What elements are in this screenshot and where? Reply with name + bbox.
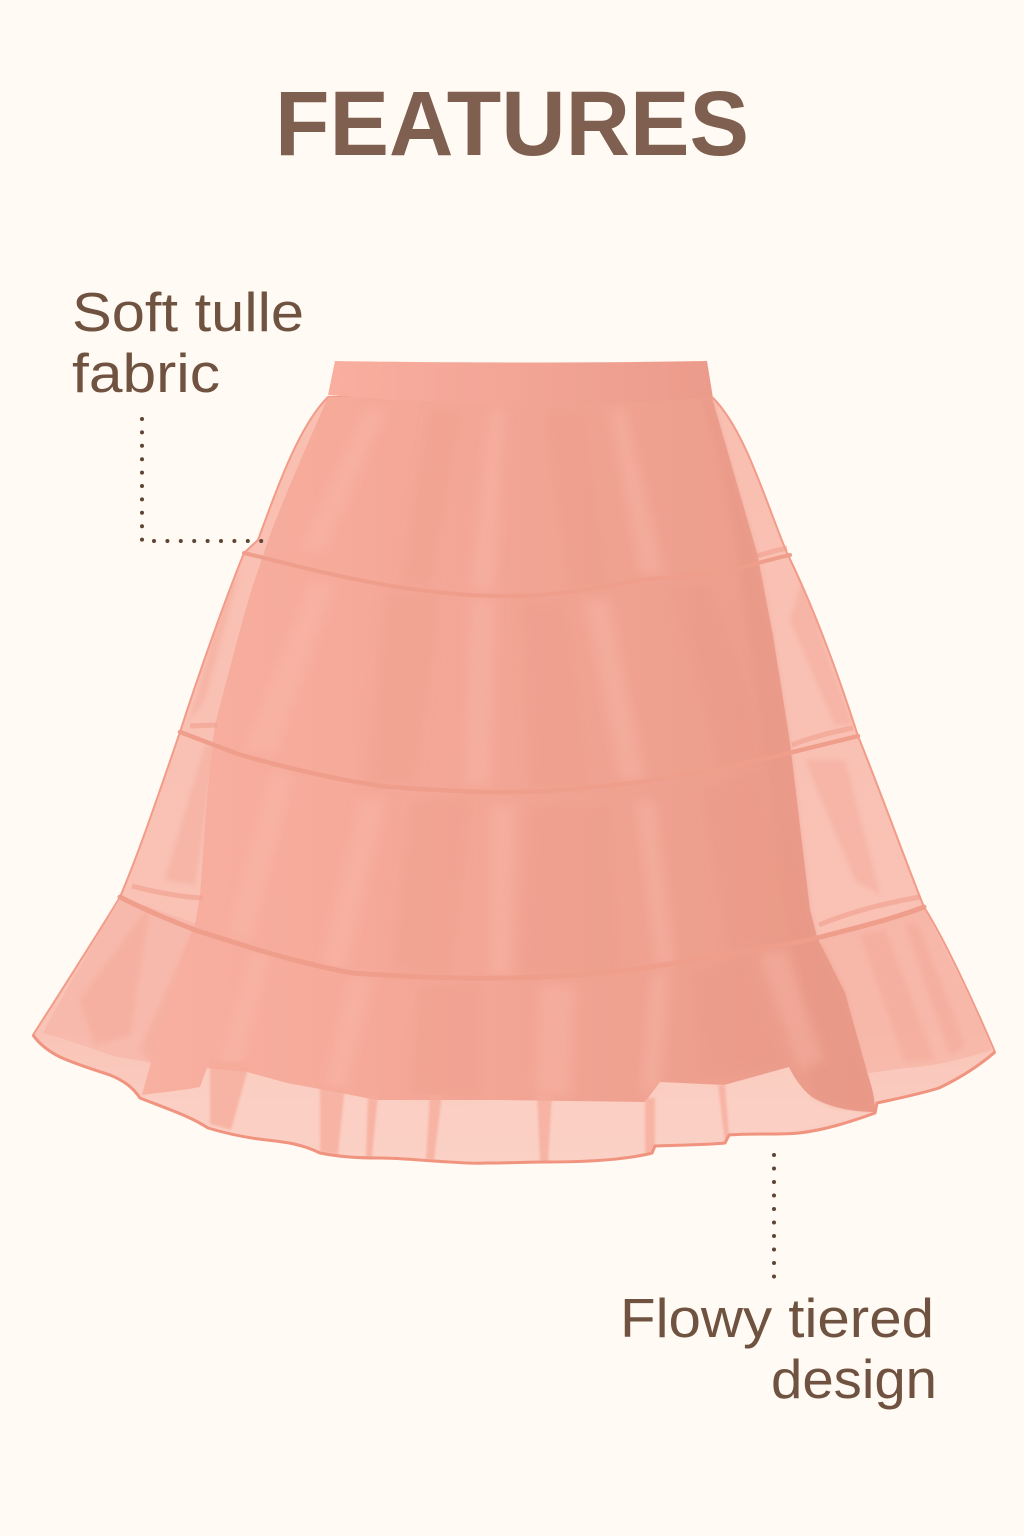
label: soft tulle fabric: fabric xyxy=(72,342,220,404)
skirt: hem edge line xyxy=(33,1035,995,1163)
skirt: sheer side layers xyxy=(43,570,992,1165)
skirt: back-layer seam bands xyxy=(132,548,920,925)
label: flowy tiered design: design xyxy=(771,1348,937,1410)
title: FEATURES xyxy=(275,73,749,175)
callout: soft tulle fabric xyxy=(72,281,304,541)
skirt: lower hem light panel xyxy=(206,1068,210,1070)
skirt: sheer outer layer xyxy=(33,397,995,1163)
skirt: right flounce underlayer xyxy=(820,907,992,1073)
dotted leader line xyxy=(142,419,262,541)
label: soft tulle fabric: Soft tulle xyxy=(72,281,304,343)
dotted leader line xyxy=(772,1155,776,1278)
callout: flowy tiered design xyxy=(620,1155,937,1410)
skirt illustration xyxy=(33,361,995,1165)
skirt: dark right edge shading xyxy=(700,398,875,1112)
skirt: opaque front body xyxy=(142,397,875,1112)
skirt: waistband xyxy=(328,361,713,404)
skirt: tier seams xyxy=(120,553,924,978)
label: flowy tiered design: Flowy tiered xyxy=(620,1287,934,1349)
skirt: bottom tier flounce strips xyxy=(210,1060,729,1162)
skirt: left flounce underlayer xyxy=(43,900,195,1062)
skirt: fold highlights and shadows xyxy=(220,410,825,1095)
skirt: side fold shading xyxy=(80,570,965,1085)
